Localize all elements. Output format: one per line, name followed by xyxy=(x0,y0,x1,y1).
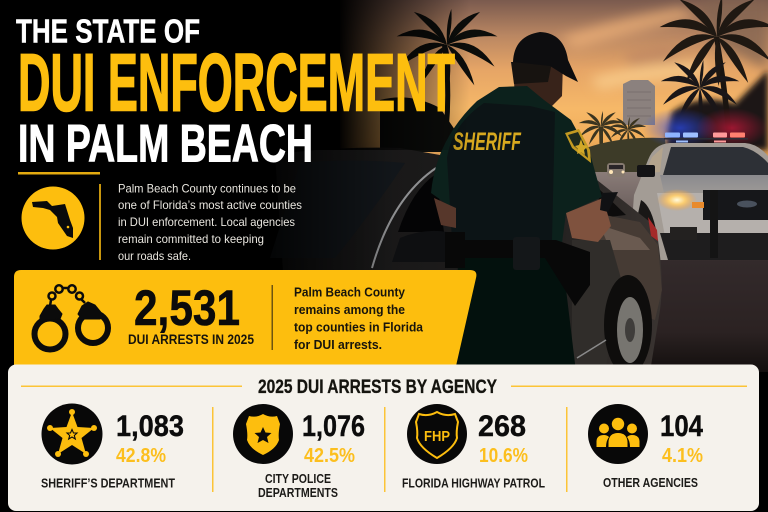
callout text: for DUI arrests. xyxy=(294,337,382,352)
title xyxy=(16,12,455,174)
agency: highway patrol xyxy=(402,404,545,490)
shoulder badge xyxy=(565,129,591,163)
icon: police badge xyxy=(233,404,293,464)
label: SHERIFF’S DEPARTMENT xyxy=(41,476,175,490)
panel heading: 2025 DUI ARRESTS BY AGENCY xyxy=(258,377,497,398)
value: 104 xyxy=(660,410,703,443)
stat label: DUI ARRESTS IN 2025 xyxy=(128,331,254,347)
title line 1: THE STATE OF xyxy=(16,12,200,50)
value: 1,076 xyxy=(302,410,365,443)
officer belt xyxy=(445,232,590,306)
title line 3: IN PALM BEACH xyxy=(18,114,313,174)
distant car xyxy=(607,163,625,177)
intro text: our roads safe. xyxy=(118,249,191,263)
officer cap xyxy=(513,32,578,82)
label: OTHER AGENCIES xyxy=(603,476,698,490)
share: 4.1% xyxy=(662,445,703,467)
icon: sheriff star xyxy=(42,404,102,464)
officer legs xyxy=(456,256,576,372)
value: 1,083 xyxy=(116,410,184,443)
callout text: remains among the xyxy=(294,302,405,317)
police car xyxy=(632,108,768,266)
icon: Florida map xyxy=(22,186,84,250)
panel: arrests by agency xyxy=(8,364,759,511)
intro text: remain committed to keeping xyxy=(118,232,264,246)
label: DEPARTMENTS xyxy=(258,486,338,500)
label: FLORIDA HIGHWAY PATROL xyxy=(402,476,545,490)
stat: total arrests: 2,531 xyxy=(134,280,240,336)
road xyxy=(590,172,768,372)
agency: sheriff xyxy=(41,404,184,490)
icon: FHP shield xyxy=(407,404,467,464)
value: 268 xyxy=(478,410,526,443)
panel: total arrests xyxy=(14,270,476,366)
share: 10.6% xyxy=(479,445,528,467)
parked black car xyxy=(270,148,662,375)
left fade to black: car area xyxy=(0,150,395,270)
intro text: one of Florida’s most active counties xyxy=(118,198,302,212)
callout text: Palm Beach County xyxy=(294,284,406,300)
callout text xyxy=(294,284,424,352)
sunset sky xyxy=(340,0,768,175)
officer xyxy=(431,32,618,372)
intro text: Palm Beach County continues to be xyxy=(118,182,296,196)
icon: handcuffs xyxy=(34,285,108,350)
officer vest xyxy=(447,103,555,240)
officer neck and head xyxy=(513,62,563,108)
icon: FHP shield: FHP xyxy=(424,428,450,445)
intro text xyxy=(118,182,302,263)
building xyxy=(623,80,655,125)
label: CITY POLICE xyxy=(265,472,331,486)
officer arms xyxy=(434,198,456,228)
palm trees xyxy=(380,0,768,172)
officer shirt xyxy=(431,86,602,258)
icon: group of people xyxy=(588,404,648,464)
intro text: in DUI enforcement. Local agencies xyxy=(118,215,295,229)
agency: city police xyxy=(233,404,365,500)
share: 42.8% xyxy=(116,445,166,467)
callout text: top counties in Florida xyxy=(294,320,424,334)
label xyxy=(258,472,338,500)
left fade to black: sky area xyxy=(0,0,470,150)
agency: other xyxy=(588,404,703,490)
share: 42.5% xyxy=(304,445,355,467)
sheriff lettering: SHERIFF xyxy=(453,128,521,156)
